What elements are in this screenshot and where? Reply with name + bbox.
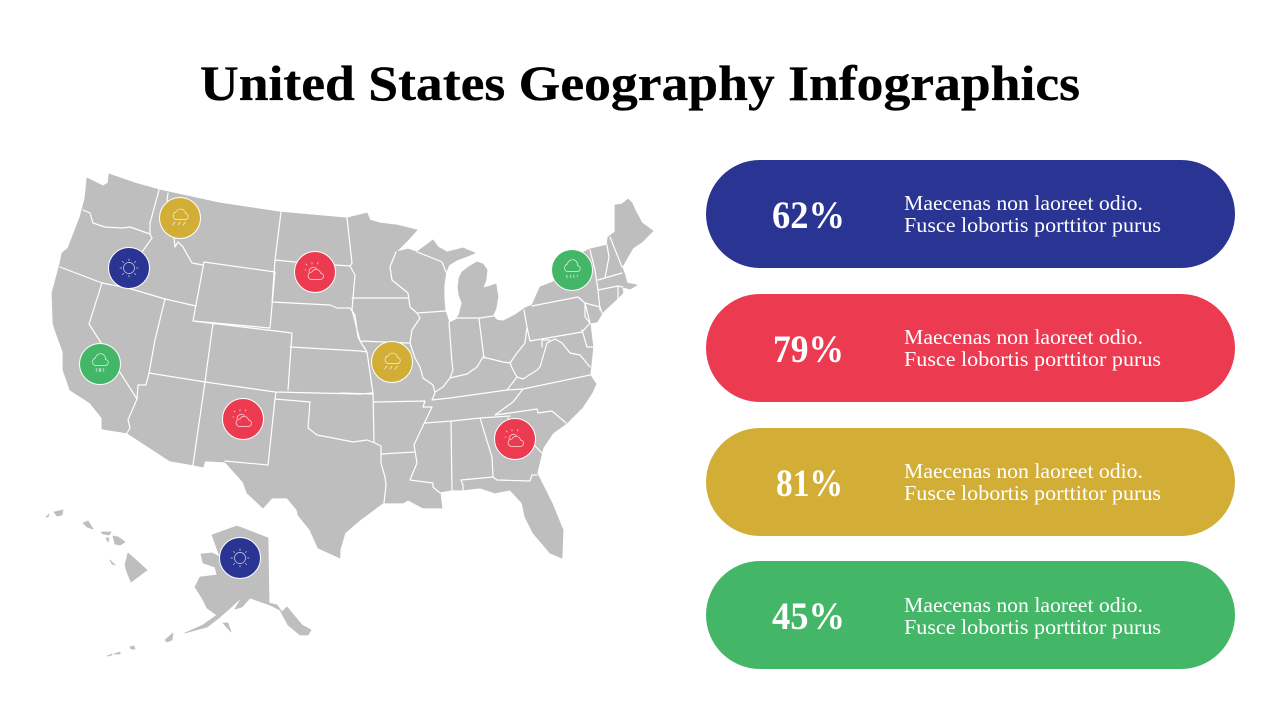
map of the United States bbox=[46, 174, 653, 656]
panel: 79%: Fusce lobortis porttitor purus bbox=[904, 347, 1161, 371]
panel: 45%: Fusce lobortis porttitor purus bbox=[904, 615, 1161, 639]
Alaska bbox=[185, 526, 311, 635]
marker: California snow bbox=[80, 344, 120, 384]
panel: 45% bbox=[706, 561, 1235, 669]
marker: South Dakota partly cloudy bbox=[294, 252, 336, 292]
panel: 81%: 81% bbox=[776, 462, 843, 505]
panel: 81%: Fusce lobortis porttitor purus bbox=[904, 481, 1161, 505]
title: United States Geography Infographics bbox=[200, 55, 1080, 111]
contiguous states bbox=[52, 174, 653, 558]
marker: Idaho / Montana rain bbox=[160, 198, 200, 238]
panel: 79% bbox=[706, 294, 1235, 402]
panel: 79%: Maecenas non laoreet odio. bbox=[904, 325, 1143, 349]
marker: New York snow bbox=[552, 250, 592, 290]
panel: 45%: 45% bbox=[772, 595, 845, 638]
marker: Alaska sun bbox=[220, 538, 260, 578]
Alaska islands bbox=[107, 623, 231, 656]
panel: 45%: Maecenas non laoreet odio. bbox=[904, 593, 1143, 617]
Hawaii bbox=[46, 510, 147, 582]
panel: 62% bbox=[706, 160, 1235, 268]
panel: 81% bbox=[706, 428, 1235, 536]
marker: Missouri rain bbox=[372, 342, 412, 382]
panel: 62%: Fusce lobortis porttitor purus bbox=[904, 213, 1161, 237]
panel: 81%: Maecenas non laoreet odio. bbox=[904, 459, 1143, 483]
marker: New Mexico partly cloudy bbox=[222, 398, 264, 440]
panel: 62%: Maecenas non laoreet odio. bbox=[904, 191, 1143, 215]
marker: Georgia partly cloudy bbox=[494, 418, 536, 460]
panel: 62%: 62% bbox=[772, 194, 845, 237]
panel: 79%: 79% bbox=[773, 328, 844, 371]
marker: Oregon sun bbox=[108, 248, 150, 288]
